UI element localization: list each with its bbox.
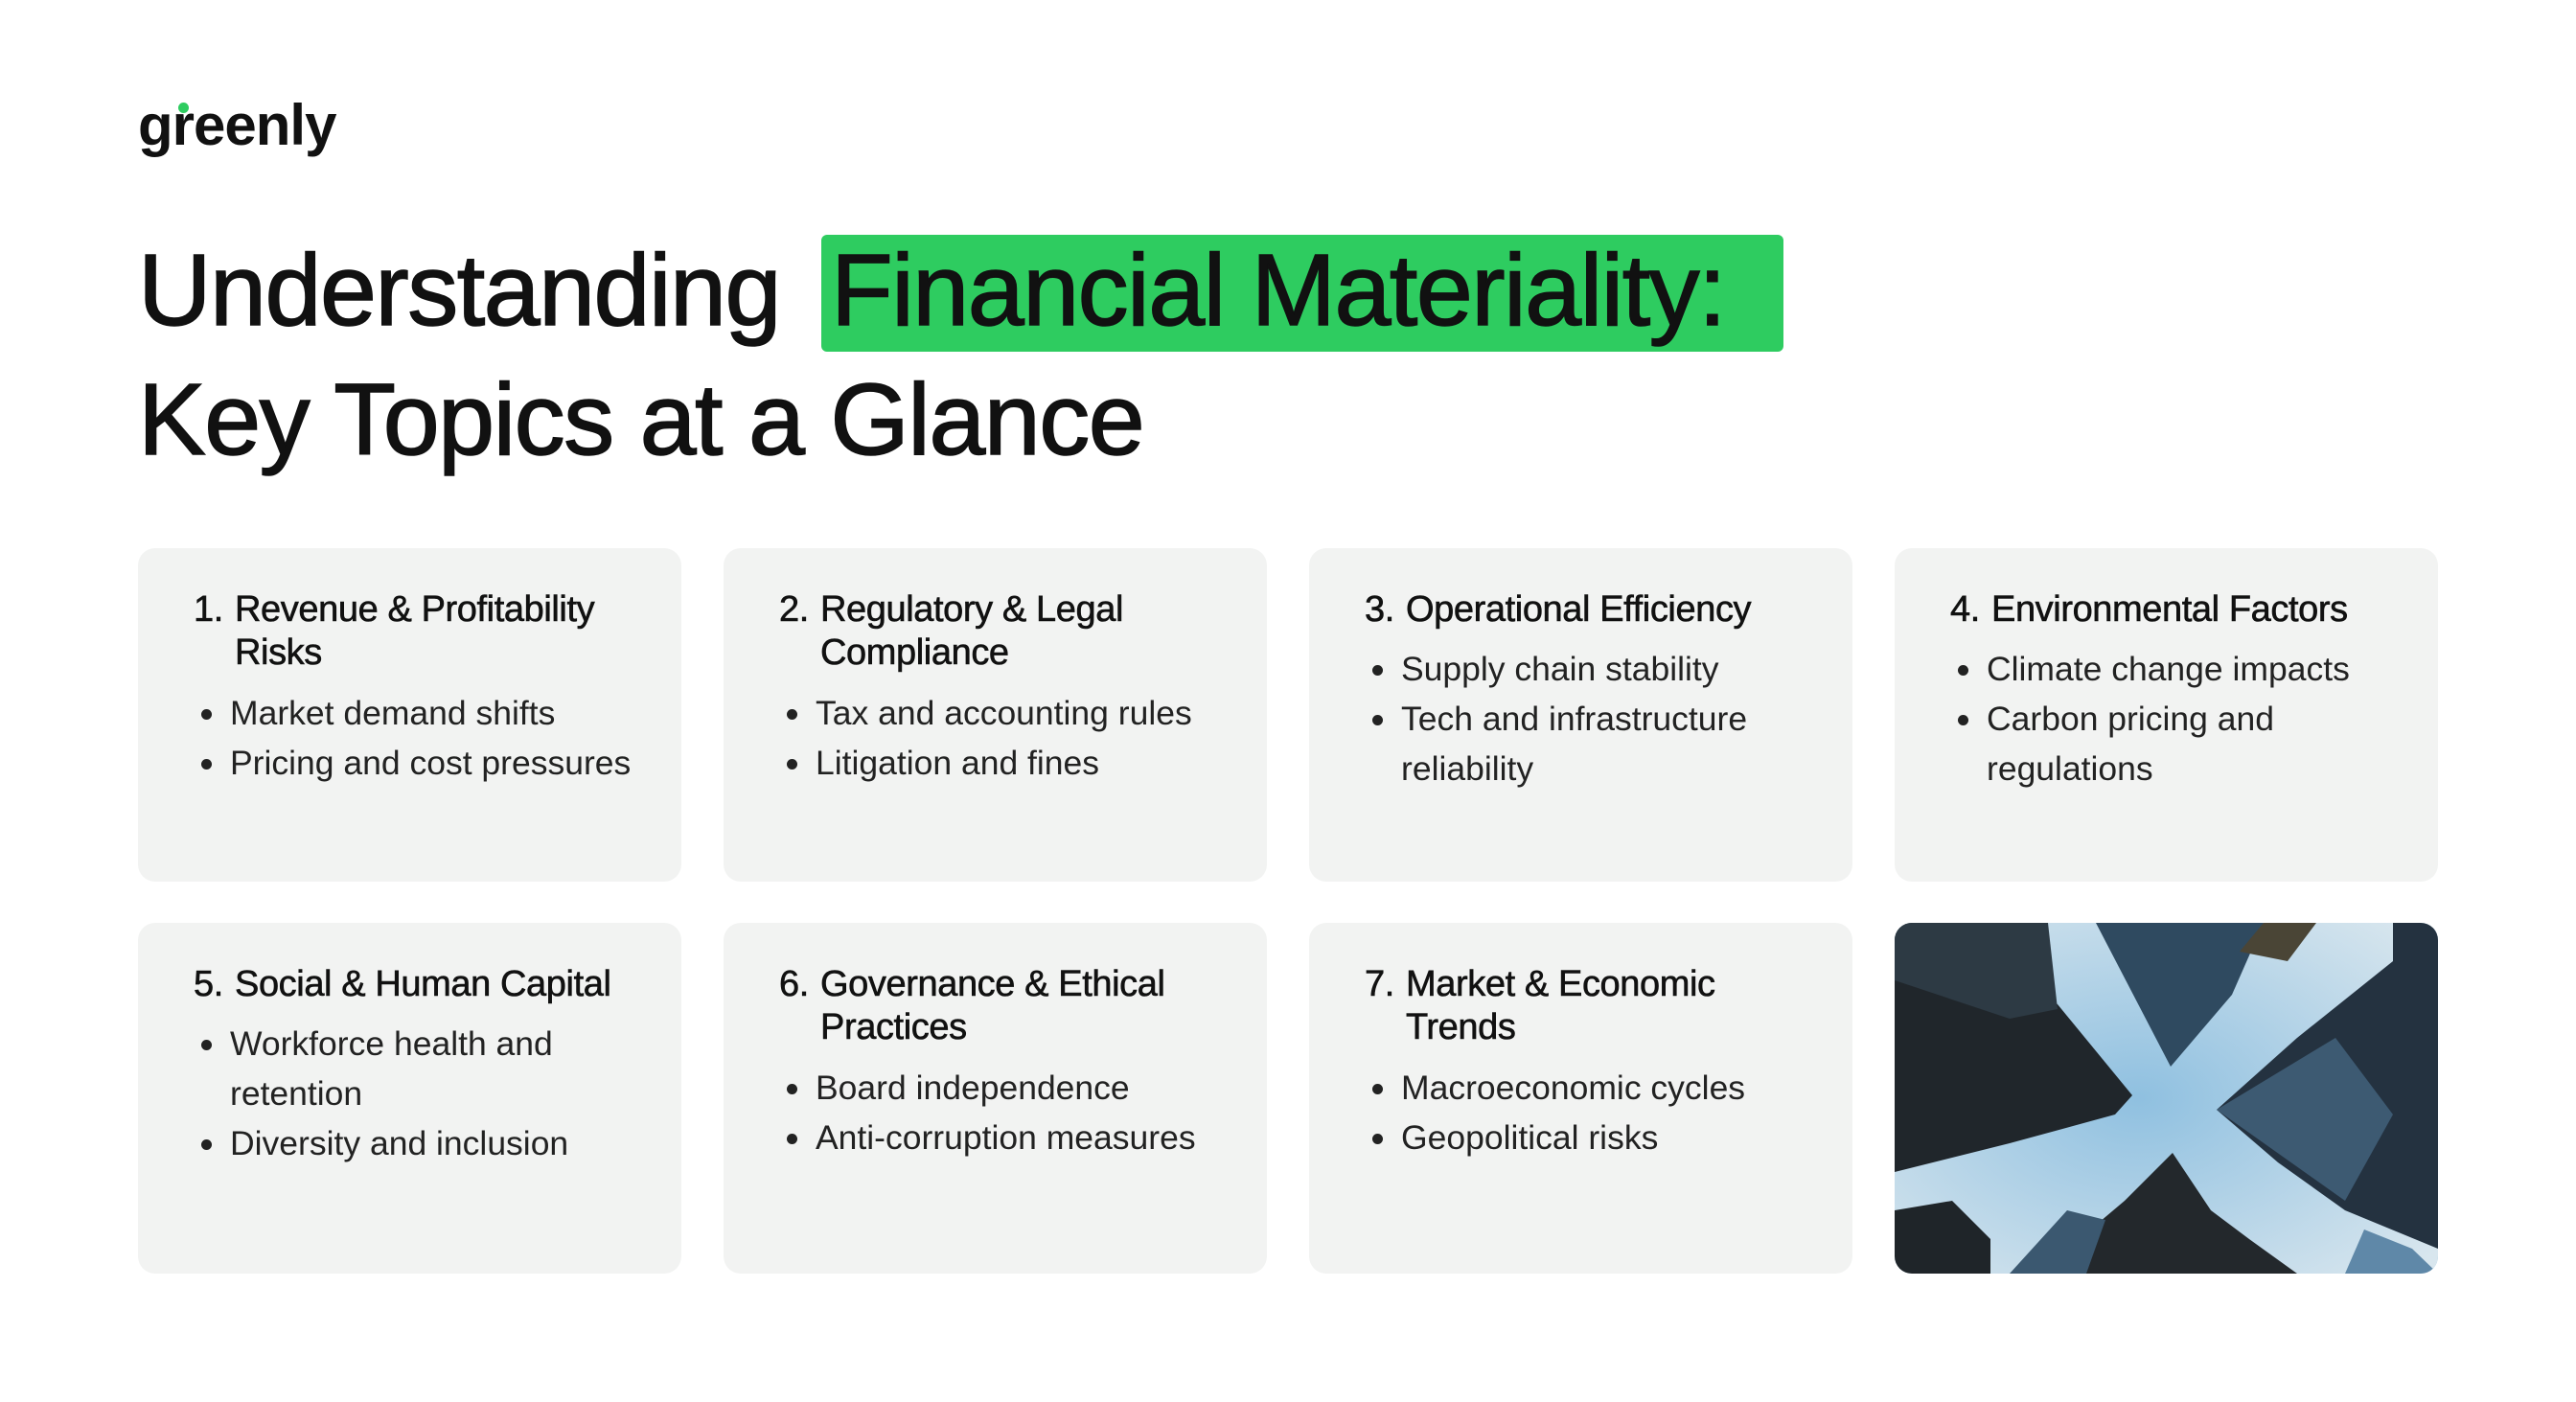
bullets: Carbon pricing and regulations: [1987, 700, 2274, 788]
bullets: Litigation and fines: [816, 744, 1099, 782]
heading: Governance & Ethical Practices: [820, 964, 1165, 1047]
heading: 3.: [1365, 589, 1394, 630]
bullets: Tax and accounting rules: [816, 694, 1192, 732]
title highlight: [821, 235, 1783, 352]
bullets: Supply chain stability: [1401, 650, 1719, 688]
title: Financial Materiality:: [831, 234, 1725, 347]
bullets: [201, 1024, 568, 1162]
bullets: [1372, 650, 1747, 788]
bullets: Market demand shifts: [230, 694, 555, 732]
bullets: Pricing and cost pressures: [230, 744, 631, 782]
heading: Social & Human Capital: [235, 964, 611, 1004]
panel: 3 operational: [1309, 548, 1852, 882]
logo: greenly: [138, 93, 335, 157]
heading: 6.: [779, 964, 809, 1004]
heading: Market & Economic Trends: [1406, 964, 1715, 1047]
photo: skyscrapers: [1895, 923, 2438, 1274]
title: Understanding: [138, 234, 780, 347]
heading: Operational Efficiency: [1406, 589, 1751, 630]
bullets: [787, 694, 1192, 782]
panel: 4 environmental: [1895, 548, 2438, 882]
heading: Regulatory & Legal Compliance: [820, 589, 1123, 673]
bullets: [1372, 1069, 1745, 1157]
bullets: Macroeconomic cycles: [1401, 1069, 1745, 1107]
title: [138, 234, 1725, 476]
bullets: Geopolitical risks: [1401, 1118, 1658, 1157]
bullets: [787, 1069, 1196, 1157]
title: Key Topics at a Glance: [138, 363, 1143, 476]
bullets: Tech and infrastructure reliability: [1401, 700, 1747, 788]
heading: 2.: [779, 589, 809, 630]
heading: 7.: [1365, 964, 1394, 1004]
heading: 5.: [194, 964, 223, 1004]
heading: Environmental Factors: [1991, 589, 2348, 630]
panel: 2 regulatory: [724, 548, 1267, 882]
bullets: [1958, 650, 2350, 788]
panel: 6 governance: [724, 923, 1267, 1274]
bullets: Workforce health and retention: [230, 1024, 553, 1113]
bullets: Diversity and inclusion: [230, 1124, 568, 1162]
heading: Revenue & Profitability Risks: [235, 589, 594, 673]
heading: 4.: [1950, 589, 1980, 630]
bullets: Anti-corruption measures: [816, 1118, 1196, 1157]
heading: 1.: [194, 589, 223, 630]
bullets: [201, 694, 631, 782]
panel: 5 social: [138, 923, 681, 1274]
panel: 1 revenue: [138, 548, 681, 882]
panel: 7 market: [1309, 923, 1852, 1274]
bullets: Board independence: [816, 1069, 1130, 1107]
bullets: Climate change impacts: [1987, 650, 2350, 688]
